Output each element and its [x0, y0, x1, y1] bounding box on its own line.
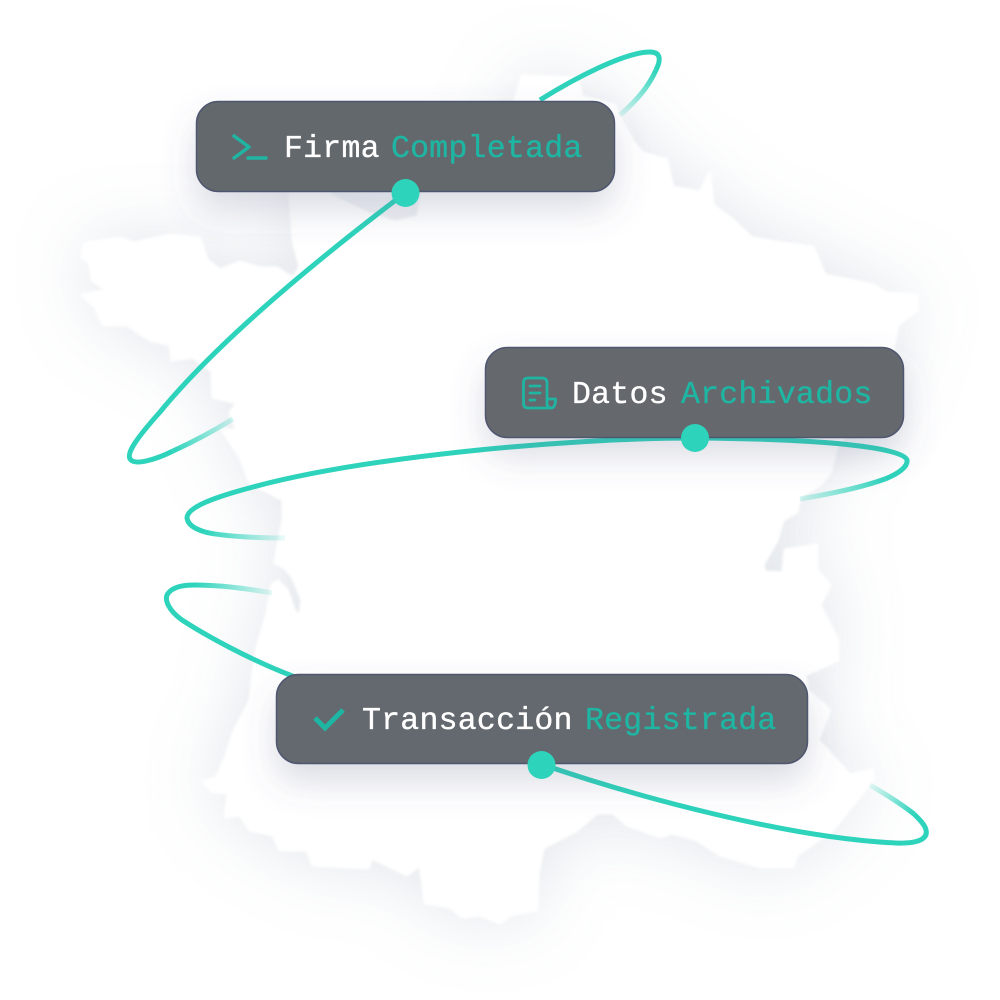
card: Transacción Registrada	[276, 674, 808, 764]
curve: top loop	[540, 52, 659, 115]
label: Transacción Registrada: Registrada	[585, 704, 777, 739]
card: Datos Archivados	[486, 348, 904, 438]
label: Firma Completada	[284, 132, 583, 167]
label: Datos Archivados: Archivados	[681, 378, 873, 413]
label: Firma Completada: Completada	[391, 132, 583, 167]
curve: middle loop	[187, 438, 907, 538]
icon: document	[524, 378, 556, 408]
map of France with soft shadow	[82, 76, 917, 923]
connector dots	[392, 179, 709, 779]
icon: check mark	[315, 710, 343, 728]
curve: left lower loop	[166, 585, 295, 677]
card: Firma Completada	[196, 102, 614, 192]
label: Firma Completada: Firma	[284, 132, 380, 167]
curve: bottom right loop	[541, 764, 926, 843]
map land	[82, 76, 917, 923]
label: Transacción Registrada	[362, 704, 777, 739]
curve: first signature loop	[129, 193, 405, 462]
curves	[129, 52, 926, 843]
icon: terminal prompt	[234, 136, 266, 158]
label: Datos Archivados	[572, 378, 873, 413]
label: Datos Archivados: Datos	[572, 378, 668, 413]
label: Transacción Registrada: Transacción	[362, 704, 573, 739]
map shadow	[82, 76, 917, 923]
